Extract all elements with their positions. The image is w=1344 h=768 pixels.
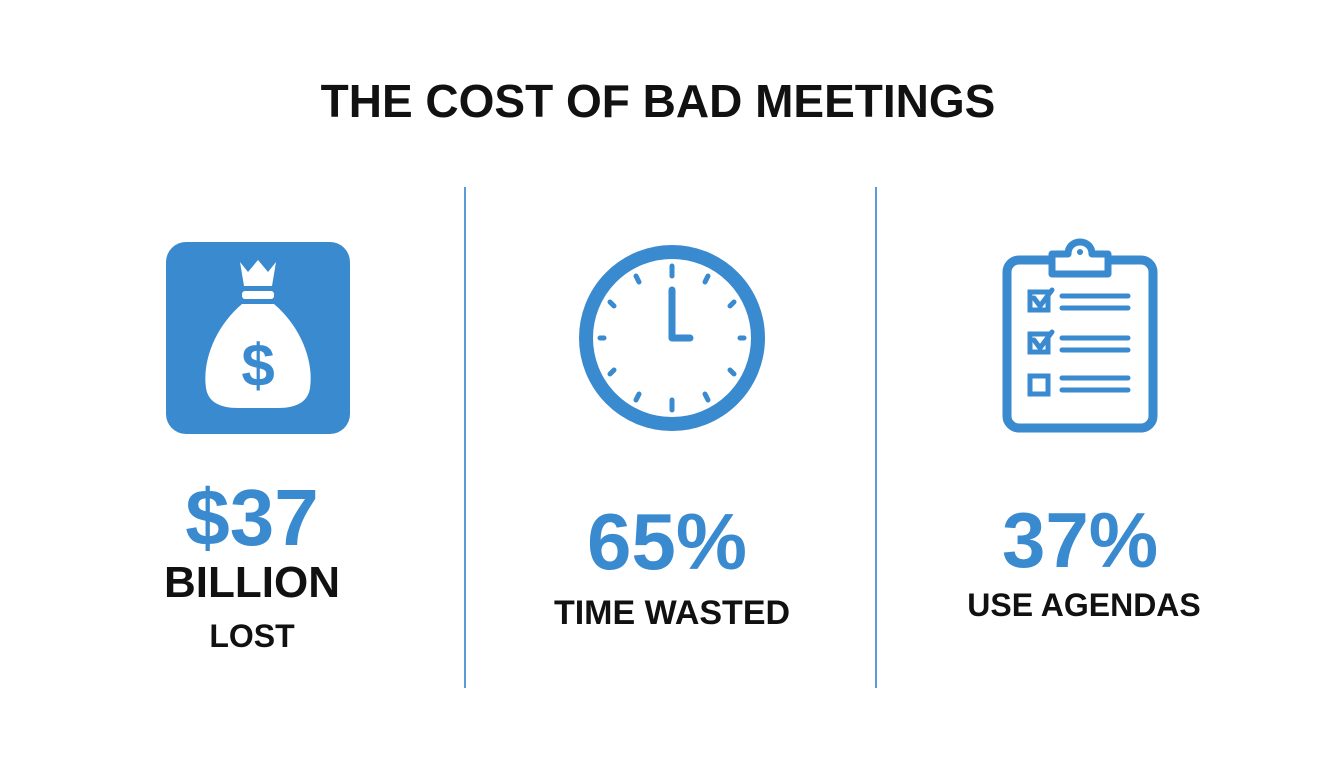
icon: clock — [579, 245, 765, 431]
icon: money bag: $ — [241, 332, 275, 399]
title: THE COST OF BAD MEETINGS — [321, 75, 995, 127]
stat: 65%: 65% — [587, 497, 747, 586]
label: billion lost: LOST — [209, 618, 295, 654]
label: billion lost: BILLION — [164, 558, 340, 607]
label: billion lost — [164, 558, 340, 654]
icon: clipboard — [1002, 238, 1158, 432]
panel: agendas — [967, 238, 1201, 623]
divider right — [875, 187, 877, 688]
stat: 37%: 37% — [1002, 496, 1158, 584]
divider left — [464, 187, 466, 688]
panel: time — [554, 245, 790, 632]
icon: money bag — [166, 242, 350, 434]
label: use agendas: USE AGENDAS — [967, 587, 1201, 623]
label: time wasted: TIME WASTED — [554, 594, 790, 632]
panel: money — [164, 242, 350, 654]
stat: $37: $37 — [185, 473, 319, 562]
